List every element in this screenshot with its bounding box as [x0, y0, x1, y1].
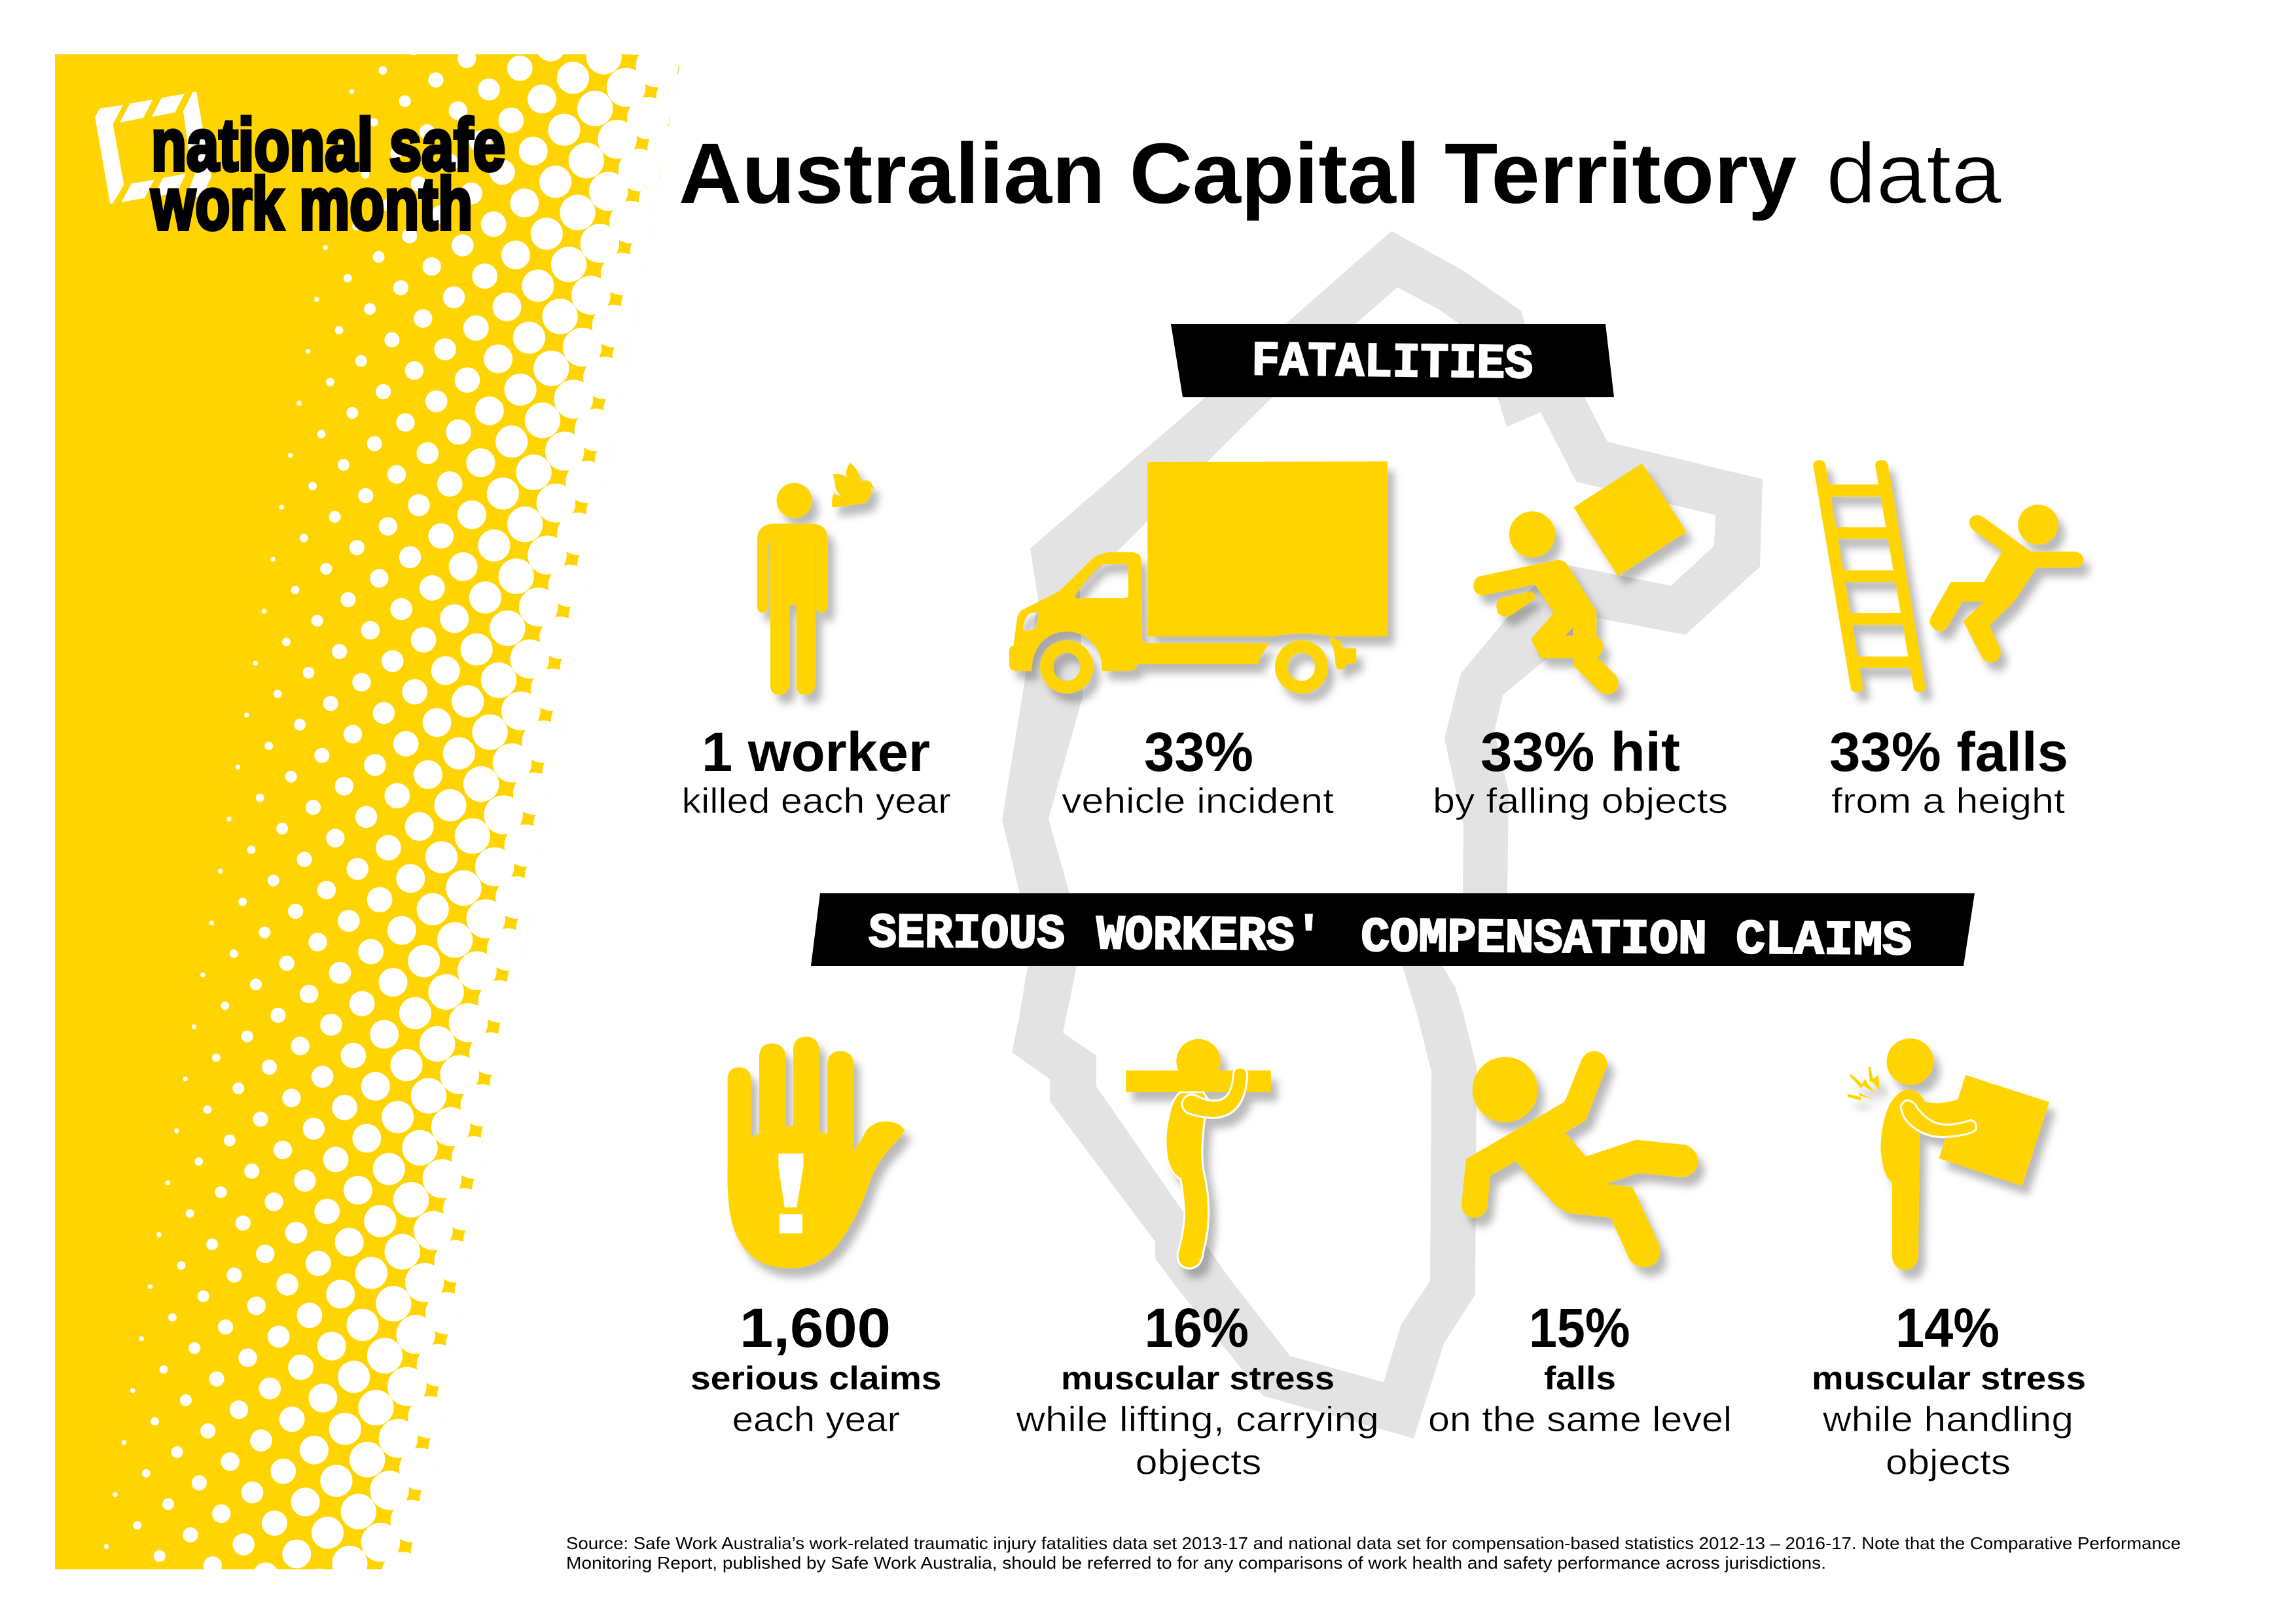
stat: 15% falls on the same level [1428, 1297, 1732, 1439]
icon: person slipping on the same level [1462, 1051, 1698, 1268]
logo: national safe work month [95, 92, 505, 245]
panel: yellow halftone band [55, 54, 681, 1569]
icon: exclamation mark [778, 1154, 803, 1234]
logo text line 1: national safe [151, 104, 505, 186]
banner: serious workers' compensation claims: COMPENSATION [1361, 911, 1707, 968]
stat: 15% falls on the same level: 15% [1529, 1297, 1630, 1359]
icon: truck [1009, 461, 1388, 694]
icon: stop hand with exclamation mark [727, 1037, 905, 1268]
stat: 33% falls from a height: from a height [1831, 781, 2065, 821]
stat: 16% muscular stress while lifting, carrying objects: while lifting, carrying [1015, 1400, 1379, 1439]
banner: serious workers' compensation claims [811, 893, 1975, 969]
stat: 33% hit by falling objects: by falling objects [1433, 781, 1728, 821]
stat: 1 worker killed each year [682, 721, 951, 821]
stat: 33% vehicle incident: vehicle incident [1062, 781, 1334, 821]
icon: worker and dove [757, 463, 874, 695]
stat: 33% falls from a height: 33% falls [1829, 721, 2068, 783]
stat: 1 worker killed each year: killed each year [682, 781, 951, 821]
icon: person carrying a beam [1126, 1039, 1271, 1268]
logo text line 2: work month [151, 163, 473, 245]
icon: logo bracket [95, 92, 211, 204]
stat: 33% hit by falling objects [1433, 721, 1728, 821]
title: Australian Capital Territory [679, 125, 1797, 221]
stat: 15% falls on the same level: falls [1544, 1360, 1616, 1397]
stat: 33% falls from a height [1829, 721, 2068, 821]
banner: serious workers' compensation claims: CLAIMS [1736, 913, 1912, 969]
source note [566, 1533, 2181, 1573]
icon: ladder and falling person [1813, 460, 2084, 692]
banner: fatalities [1171, 324, 1614, 397]
stat: 1,600 serious claims each year [691, 1297, 941, 1439]
stat: 1,600 serious claims each year: each year [732, 1400, 900, 1439]
source note: Source: Safe Work Australia’s work-related traumatic injury fatalities data set 2013-17 and national data set for compensation-based statistics 2012-13 – 2016-17. Note that the Comparative Performance [566, 1533, 2181, 1553]
stat: 33% vehicle incident [1062, 721, 1334, 821]
stat: 14% muscular stress while handling objects: while handling [1822, 1400, 2073, 1439]
background map of the ACT [1002, 231, 1763, 1438]
icon: person handling a box with shoulder pain [1848, 1039, 2049, 1270]
title: data [1826, 125, 2001, 221]
stat: 16% muscular stress while lifting, carrying objects: objects [1136, 1443, 1262, 1482]
stat: 33% vehicle incident: 33% [1144, 721, 1253, 783]
stat: 1,600 serious claims each year: 1,600 [740, 1297, 891, 1359]
stat: 14% muscular stress while handling objects: objects [1886, 1443, 2011, 1482]
banner: fatalities: FATALITIES [1251, 334, 1534, 393]
stat: 14% muscular stress while handling objects [1812, 1297, 2086, 1482]
stat: 1 worker killed each year: 1 worker [702, 721, 930, 783]
source note: Monitoring Report, published by Safe Work Australia, should be referred to for any comparisons of work health and safety performance across jurisdictions. [566, 1553, 1826, 1573]
stat: 1,600 serious claims each year: serious claims [691, 1360, 941, 1397]
stat: 33% hit by falling objects: 33% hit [1480, 721, 1680, 783]
banner: serious workers' compensation claims: SERIOUS [869, 906, 1065, 963]
stat: 14% muscular stress while handling objects: muscular stress [1812, 1360, 2086, 1397]
icon: person hit by falling object [1473, 463, 1687, 694]
stat: 16% muscular stress while lifting, carrying objects: muscular stress [1061, 1360, 1335, 1397]
stat: 14% muscular stress while handling objects: 14% [1895, 1297, 2000, 1359]
stat: 15% falls on the same level: on the same level [1428, 1400, 1732, 1439]
banner: serious workers' compensation claims: WORKERS' [1096, 908, 1323, 965]
stat: 16% muscular stress while lifting, carrying objects: 16% [1144, 1297, 1249, 1359]
stat: 16% muscular stress while lifting, carrying objects [1015, 1297, 1379, 1482]
